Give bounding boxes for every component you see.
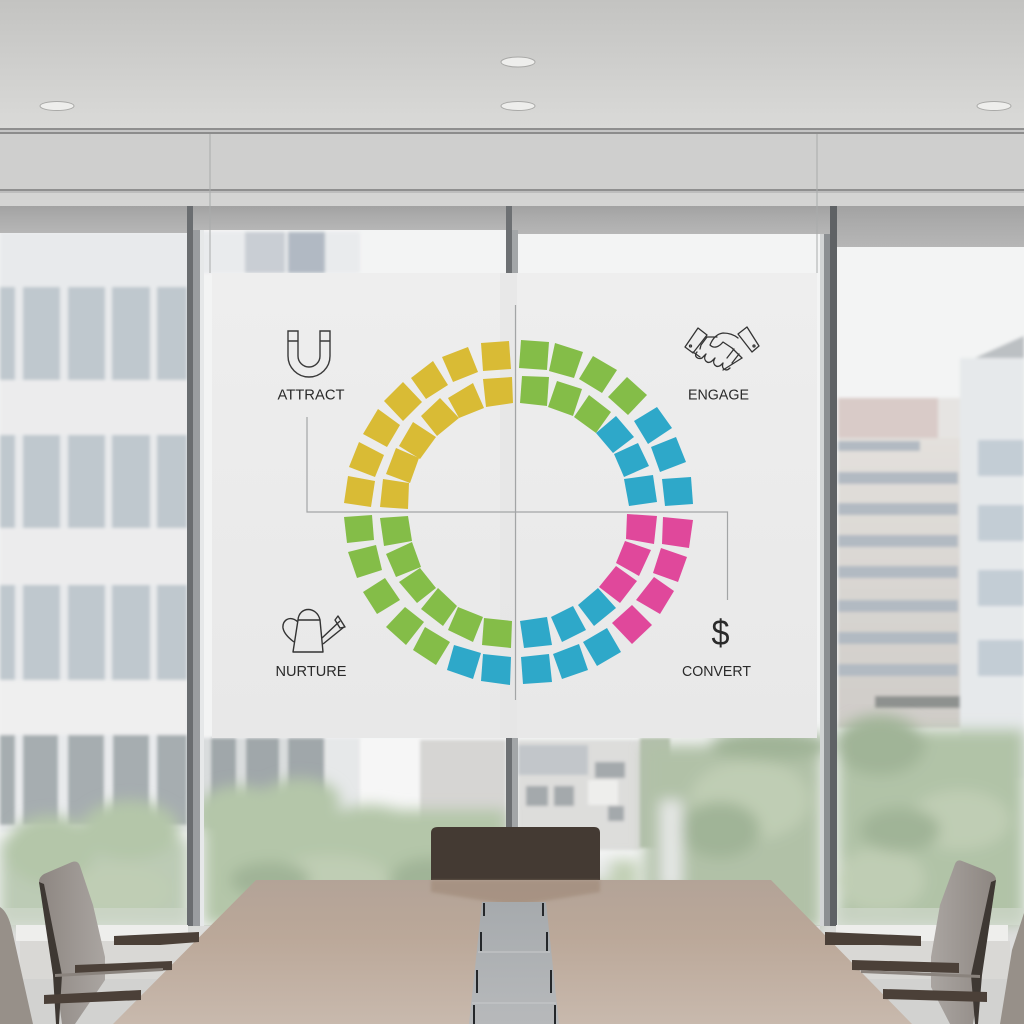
- left building: [0, 232, 700, 850]
- window sill and floor: [0, 925, 1024, 1024]
- background: city view through windows: [0, 225, 1024, 930]
- window blinds: [0, 206, 1024, 247]
- far chair: [431, 827, 600, 880]
- quadrant: nurture tiles: [344, 515, 512, 685]
- ceiling: [0, 0, 1024, 206]
- conference table: [113, 880, 912, 1024]
- right chairs: [825, 860, 1024, 1024]
- connector lines: [307, 305, 728, 700]
- panel: frosted film: [212, 273, 817, 738]
- right building: [838, 336, 1024, 778]
- label: nurture: NURTURE: [276, 664, 347, 680]
- label: attract: ATTRACT: [278, 388, 345, 404]
- icon: dollar sign: $: [712, 612, 730, 653]
- left chairs: [0, 862, 199, 1024]
- quadrant: convert tiles: [520, 514, 693, 684]
- label: convert: CONVERT: [682, 664, 751, 680]
- quadrant: attract tiles: [344, 341, 513, 509]
- icon: magnet: [288, 331, 330, 377]
- window mullions: [187, 206, 837, 926]
- icon: handshake: [685, 327, 759, 370]
- quadrant: engage tiles: [519, 340, 693, 506]
- hanging wires: [210, 134, 817, 273]
- trees: [0, 715, 1024, 930]
- label: engage: ENGAGE: [688, 388, 749, 404]
- icon: watering can: [283, 610, 345, 652]
- table cable tray: [469, 902, 559, 1024]
